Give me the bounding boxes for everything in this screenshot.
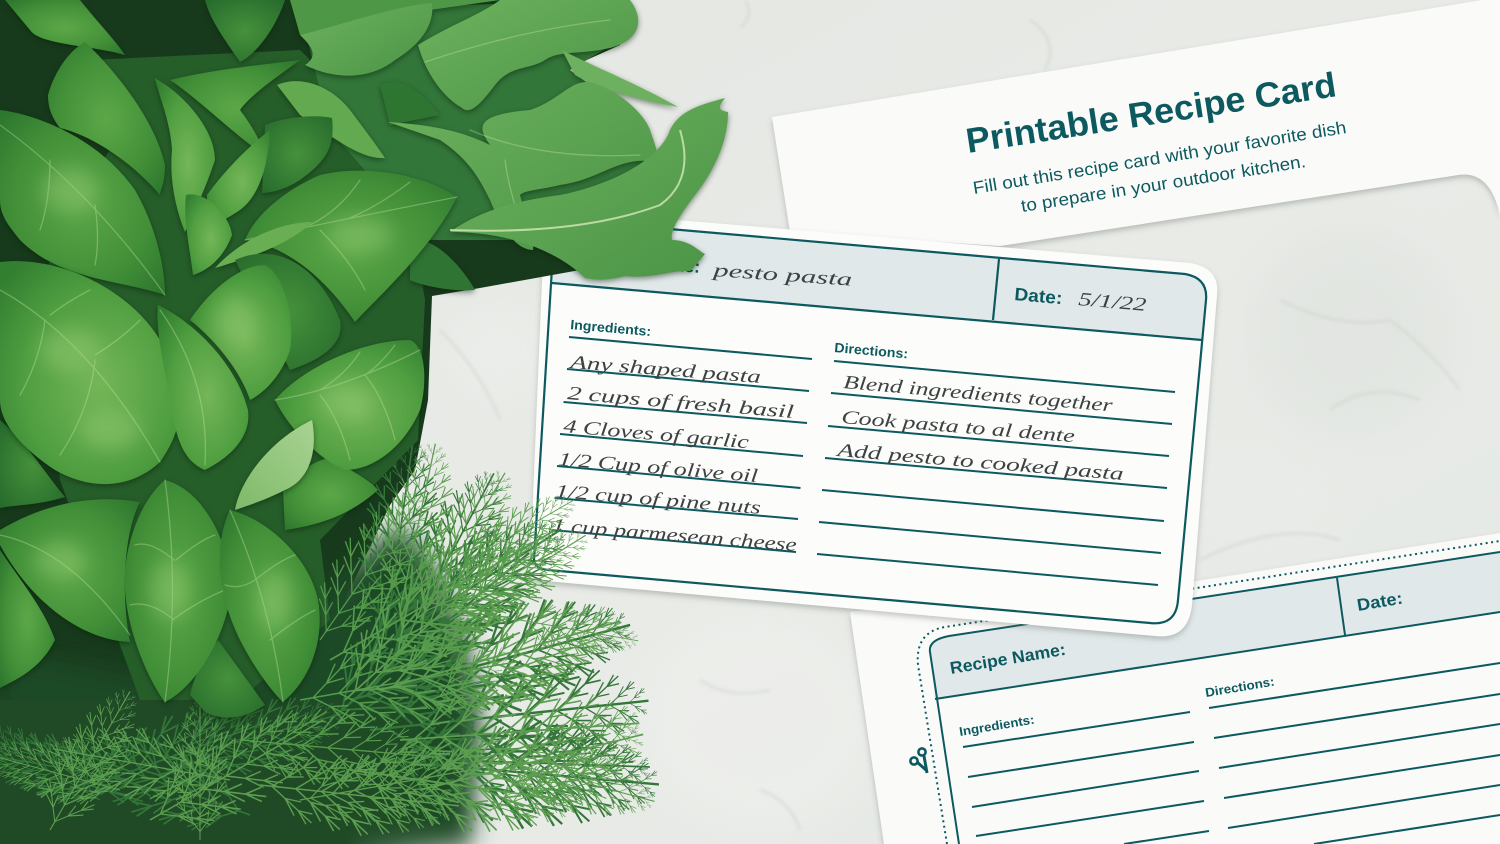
dill base foliage, bottom band xyxy=(0,700,480,844)
subtitle line 1: Fill out this recipe card with your favorite dish xyxy=(971,117,1348,198)
basil leaf right xyxy=(275,340,424,470)
arugula stem leaf xyxy=(562,50,678,107)
dashed cut line xyxy=(918,541,1500,844)
handwritten ingredients: 1/2 cup of pine nuts xyxy=(555,481,762,519)
handwritten ingredients: 2 cups of fresh basil xyxy=(567,383,795,423)
largest basil leaf xyxy=(0,261,181,484)
handwritten directions xyxy=(834,372,1124,485)
backing foliage filling the gaps xyxy=(40,0,650,700)
card frame xyxy=(534,219,1206,623)
arugula leaf middle xyxy=(388,82,657,250)
title: Printable Recipe Card xyxy=(963,65,1339,161)
label: recipe name: Recipe Name: xyxy=(586,247,701,277)
arugula leaf lower right over the card xyxy=(450,98,728,280)
pale young basil leaf xyxy=(235,420,314,510)
label: ingredients: Ingredients: xyxy=(958,713,1035,739)
label: directions: Directions: xyxy=(834,340,909,361)
handwritten directions: Add pesto to cooked pasta xyxy=(834,440,1124,485)
arugula leaves xyxy=(290,0,728,290)
shadow mass beneath the greens xyxy=(0,0,660,844)
label: date: Date: xyxy=(1014,284,1063,308)
writing lines xyxy=(963,663,1500,844)
handwritten date: 5/1/22 xyxy=(1078,289,1148,316)
label: ingredients: Ingredients: xyxy=(570,317,652,339)
handwritten ingredients: 1 cup parmesean cheese xyxy=(552,515,797,556)
arugula leaf top xyxy=(300,3,432,76)
dill tips over the leaves and the card xyxy=(237,472,581,797)
basil leaves, back layer xyxy=(0,0,457,530)
header band xyxy=(552,219,1206,340)
handwritten ingredients xyxy=(552,352,797,556)
label: directions: Directions: xyxy=(1204,675,1276,700)
label: recipe name: Recipe Name: xyxy=(949,640,1067,678)
writing lines xyxy=(552,337,1175,585)
subtitle line 2: to prepare in your outdoor kitchen. xyxy=(1019,151,1307,216)
leaf highlights xyxy=(34,168,392,630)
filled out recipe card xyxy=(530,209,1217,636)
basil leaf lower center xyxy=(125,480,231,702)
handwritten recipe name: pesto pasta xyxy=(709,260,853,291)
handwritten ingredients: 1/2 Cup of olive oil xyxy=(558,449,759,487)
handwritten ingredients: Any shaped pasta xyxy=(567,352,762,388)
handwritten directions: Blend ingredients together xyxy=(843,372,1114,417)
large basil leaf top center xyxy=(245,171,457,322)
lower blank recipe card sheet xyxy=(850,533,1500,844)
label: date: Date: xyxy=(1356,589,1404,615)
card frame xyxy=(930,552,1500,844)
dill base foliage xyxy=(0,525,480,844)
header band xyxy=(930,552,1500,699)
back sheet: printable recipe card header xyxy=(772,0,1500,246)
icon: scissors xyxy=(910,748,927,773)
large basil leaf top left xyxy=(0,110,165,295)
dill sprigs, front layer xyxy=(0,437,663,844)
basil leaves, front layer xyxy=(0,261,320,718)
handwritten directions: Cook pasta to al dente xyxy=(841,407,1076,447)
dill sprigs, back layer xyxy=(0,436,664,844)
handwritten ingredients: 4 Cloves of garlic xyxy=(563,416,750,453)
arugula leaf top right xyxy=(418,0,638,110)
